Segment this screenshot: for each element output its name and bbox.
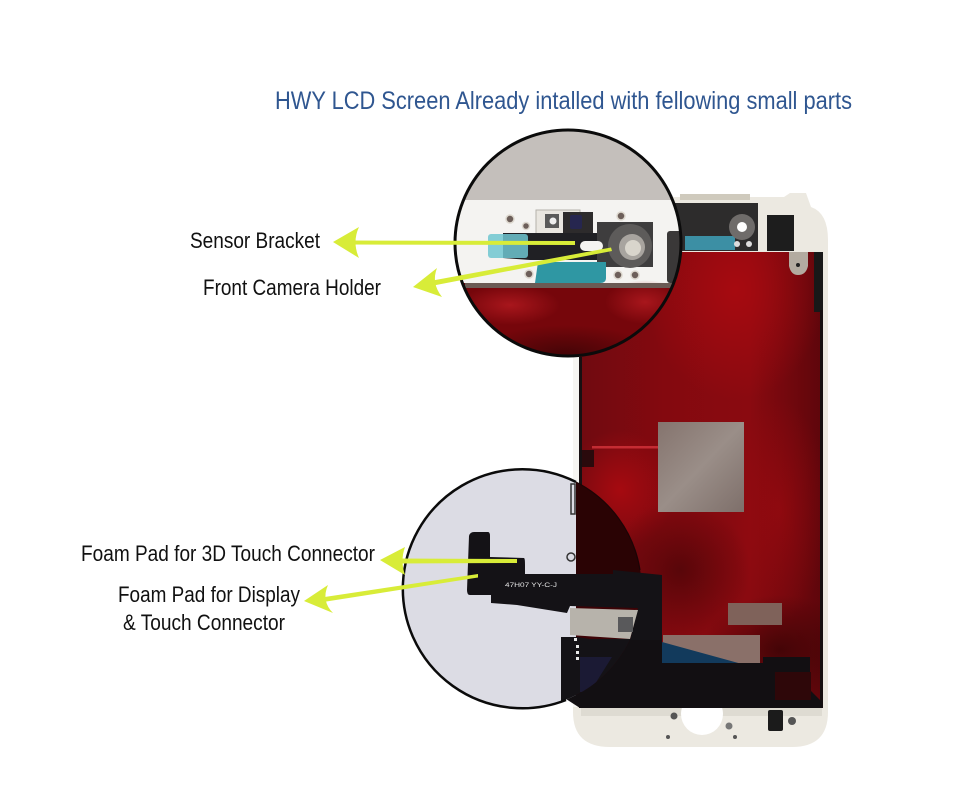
blue foam lower: [535, 262, 606, 283]
navy reflection: [580, 657, 612, 692]
blue foam left: [488, 234, 528, 258]
magnifier: foam pads: [400, 465, 646, 715]
shield sticker: [570, 608, 638, 639]
screws: [506, 212, 639, 279]
flex cable with foam pads: [467, 532, 662, 640]
silver sticker: [658, 422, 744, 512]
black flex band over the plate: [566, 632, 822, 708]
label: foam pad for display and touch connector: Foam Pad for Display: [118, 582, 300, 607]
red plate zoom: [464, 281, 670, 354]
arrow: foam pad 3D touch: [380, 547, 517, 575]
right black strip: [814, 252, 823, 312]
lower black tail: [561, 637, 630, 700]
right panel piece: [667, 231, 680, 283]
QR code: [618, 617, 633, 632]
label: foam pad for display and touch connector: [118, 582, 300, 635]
label: foam pad for display and touch connector: & Touch Connector: [123, 610, 285, 635]
darkened screen in lens: [576, 482, 640, 695]
magnifier: sensor bracket and front camera: [456, 132, 680, 354]
left frame highlight: [573, 357, 580, 707]
bracket tab: [789, 252, 808, 275]
label: sensor bracket: Sensor Bracket: [190, 228, 320, 253]
top sensor area: [673, 194, 794, 251]
infographic canvas: [82, 91, 852, 747]
metal strip: [465, 283, 675, 288]
front camera ring: [608, 224, 652, 268]
lower silver sticker and blue reflection: [662, 635, 760, 665]
grey background: [465, 132, 671, 200]
magnifier ring bottom: [403, 469, 640, 708]
arrow: front camera holder: [413, 248, 612, 297]
arrow: foam pad display: [304, 574, 478, 613]
red shielding plate: [579, 252, 823, 708]
label: foam pad for 3D touch connector: Foam Pad for 3D Touch Connector: [81, 541, 375, 566]
phone LCD screen assembly: [566, 193, 828, 747]
flex print: 47H07 YY-C-J: [505, 583, 557, 589]
arrow: sensor bracket: [333, 227, 575, 258]
pale background: [400, 465, 576, 715]
sensor bracket: [503, 210, 653, 267]
label: front camera holder: Front Camera Holder: [203, 275, 381, 300]
bottom bezel with home button opening: [581, 708, 822, 739]
white frame band: [450, 200, 685, 283]
white frame: [573, 193, 828, 747]
connector block and light streak: [582, 450, 594, 467]
frame clips: [567, 484, 575, 561]
small silver sticker: [728, 603, 782, 625]
magnifier ring top: [455, 130, 681, 356]
title: HWY LCD Screen Already intalled with fellowing small parts: [275, 87, 852, 115]
